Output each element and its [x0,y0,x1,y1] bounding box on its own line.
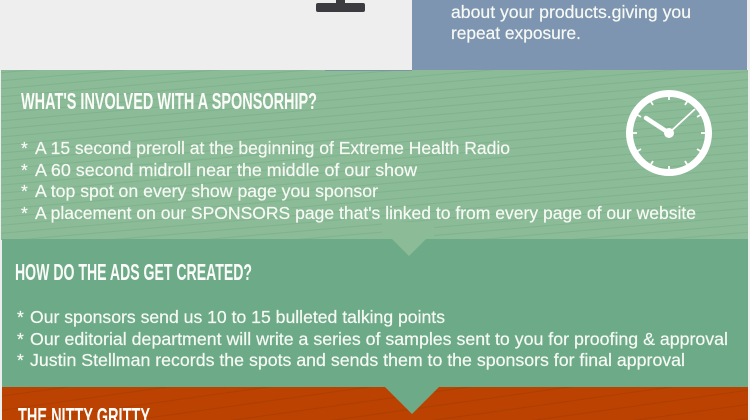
panel: how do the ads get created [2,222,748,387]
list: ad creation items: * [17,350,24,370]
list: ad creation items: Justin Stellman records the spots and sends them to the sponsors for final approval [30,350,685,370]
list: ad creation items: * [17,307,24,327]
list: sponsorship items: * [21,138,28,158]
list: sponsorship items: A 15 second preroll at the beginning of Extreme Health Radio [35,138,510,158]
blue callout text: about your products.giving you [451,2,691,22]
list: sponsorship items: * [21,203,28,223]
list: sponsorship items: * [21,181,28,201]
panel: what's involved [1,70,748,240]
panel: blue callout [412,0,747,70]
icon: monitor stand [316,0,365,12]
list: ad creation items: Our editorial department will write a series of samples sent to you for proofing & approval [30,329,728,349]
list: ad creation items [17,307,728,370]
panel: the nitty gritty [2,387,748,420]
list: sponsorship items: * [21,160,28,180]
list: ad creation items: Our sponsors send us 10 to 15 bulleted talking points [30,307,445,327]
list: sponsorship items: A 60 second midroll near the middle of our show [35,160,417,180]
blue callout text [451,2,691,43]
arrow: notch from upper panel [382,222,434,256]
icon: clock [630,94,708,172]
list: sponsorship items: A top spot on every show page you sponsor [35,181,378,201]
list: ad creation items: * [17,329,24,349]
heading: what's involved: WHAT'S INVOLVED WITH A SPONSORHIP? [21,88,317,114]
blue callout text: repeat exposure. [451,23,581,43]
list: sponsorship items: A placement on our SPONSORS page that's linked to from every page of our website [35,203,696,223]
arrow: notch from green panel [385,387,439,414]
list: sponsorship items [21,138,696,223]
heading: how do the ads get created: HOW DO THE ADS GET CREATED? [15,259,252,285]
